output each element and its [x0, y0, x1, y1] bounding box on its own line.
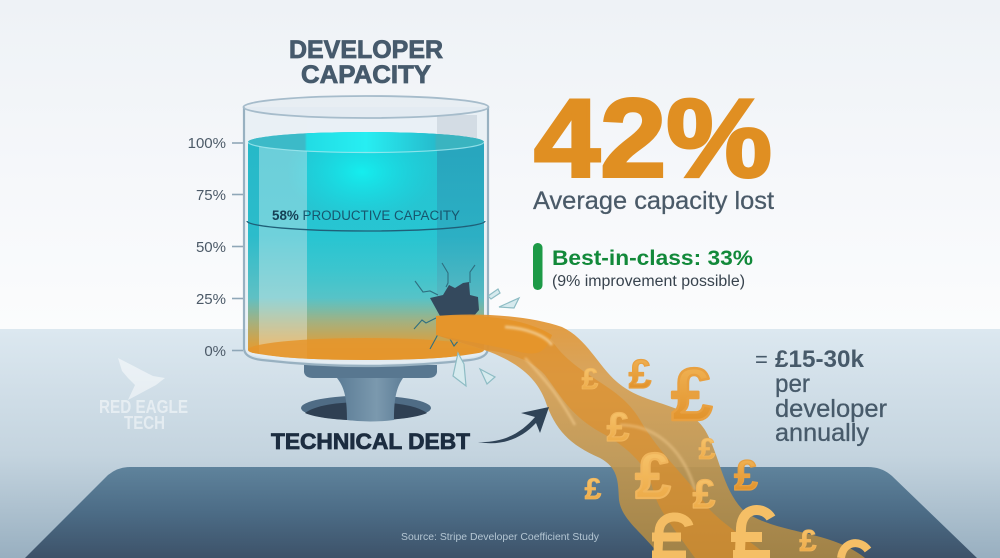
- best-in-class benchmark: Best-in-class: 33%: [552, 247, 753, 270]
- percentage axis: 50%: [196, 239, 226, 256]
- logo: Red Eagle Tech watermark: TECH: [124, 413, 165, 433]
- pouring stream: [436, 314, 865, 558]
- falling pound signs: £: [693, 471, 716, 517]
- falling pound signs: £: [607, 404, 630, 450]
- falling pound signs: £: [582, 363, 599, 396]
- falling pound signs: [582, 351, 817, 558]
- percentage axis: [188, 135, 243, 360]
- cost per developer callout: =: [755, 347, 768, 372]
- cost per developer callout: developer: [775, 395, 887, 423]
- logo: Red Eagle Tech watermark: RED EAGLE: [99, 397, 188, 417]
- background: lower floor: [0, 329, 1000, 558]
- title: DEVELOPER: [289, 36, 443, 64]
- cost per developer callout: £15-30k: [775, 346, 865, 373]
- inner deep orange current: [436, 316, 770, 558]
- improvement note: (9% improvement possible): [552, 273, 745, 290]
- icon: cropped pound sign centre: [731, 510, 771, 555]
- liquid: [248, 122, 484, 362]
- percentage axis: 100%: [188, 135, 226, 152]
- glass shards: [453, 289, 519, 386]
- crack in the glass: [414, 263, 479, 349]
- outer translucent stream: [436, 314, 865, 558]
- cost per developer callout: annually: [775, 419, 869, 447]
- 58 percent productive capacity label: 58% PRODUCTIVE CAPACITY: [272, 208, 460, 223]
- percentage axis: 0%: [204, 343, 226, 360]
- falling pound signs: £: [585, 473, 602, 506]
- cost per developer callout: [755, 346, 887, 447]
- falling pound signs: £: [629, 351, 652, 397]
- stream highlights: [505, 327, 552, 345]
- percentage axis: 25%: [196, 291, 226, 308]
- background: upper wall: [0, 0, 1000, 330]
- arrow to the stream: [478, 407, 549, 443]
- glass cylinder: [243, 96, 489, 366]
- falling pound signs: £: [734, 452, 758, 500]
- stat: 42 percent: 42%: [534, 76, 772, 200]
- logo: Red Eagle Tech watermark: [99, 358, 188, 433]
- percentage axis: 75%: [196, 187, 226, 204]
- title: [289, 36, 443, 89]
- stand and floor hole: [301, 365, 437, 422]
- falling pound signs: £: [699, 433, 716, 466]
- technical debt label: TECHNICAL DEBT: [271, 429, 471, 454]
- dark pool at the bottom: [25, 467, 977, 558]
- icon: cropped pound sign right: [841, 543, 868, 558]
- source line: Source: Stripe Developer Coefficient Study: [401, 531, 600, 543]
- title: CAPACITY: [301, 61, 431, 89]
- icon: cropped pound sign left: [652, 517, 689, 555]
- stat caption: Average capacity lost: [533, 187, 774, 215]
- falling pound signs: £: [671, 353, 713, 436]
- 58 percent level line: [247, 221, 485, 231]
- falling pound signs: £: [635, 440, 671, 512]
- cost per developer callout: per: [775, 370, 810, 398]
- falling pound signs: £: [799, 523, 817, 558]
- glass outline and rim: [244, 107, 488, 366]
- green accent bar: [533, 243, 542, 290]
